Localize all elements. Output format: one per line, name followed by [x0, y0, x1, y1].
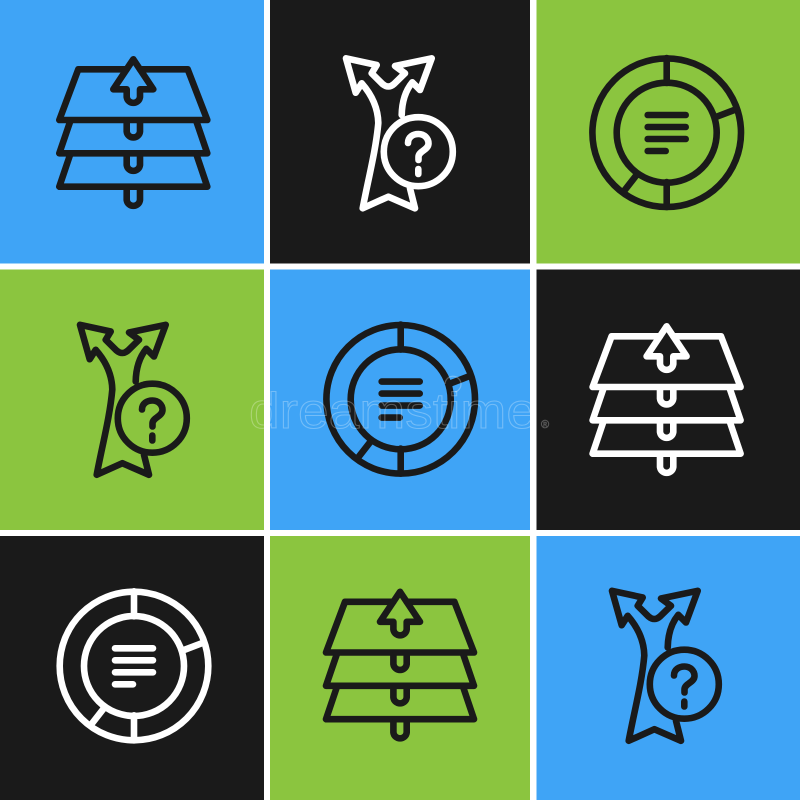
icon: stacked layers with up arrow, black — [59, 59, 207, 206]
panel: black tile, row 2 column 3 — [536, 270, 800, 530]
icon: split road arrow with question mark, black — [80, 325, 187, 475]
panel: blue tile, row 1 column 1 — [0, 0, 264, 264]
icon: donut chart with text lines, black — [326, 325, 475, 474]
panel: green tile, row 3 column 2 — [270, 536, 530, 800]
panel: blue tile, row 3 column 3 — [536, 536, 800, 800]
panel: black tile, row 3 column 1 — [0, 536, 264, 800]
icon: donut chart with text lines, white — [60, 591, 208, 740]
panel: green tile, row 1 column 3 — [536, 0, 800, 264]
icon: donut chart with text lines, black — [592, 58, 741, 207]
watermark: dreamstime — [249, 383, 537, 439]
panel: black tile, row 1 column 2 — [270, 0, 530, 264]
icon: stacked layers with up arrow, white — [593, 326, 741, 473]
panel: blue tile, row 2 column 2 — [270, 270, 530, 530]
watermark: ® — [541, 419, 549, 431]
icon: split road arrow with question mark, black — [612, 591, 719, 741]
icon: split road arrow with question mark, white — [346, 58, 453, 208]
panel: green tile, row 2 column 1 — [0, 270, 264, 530]
icon: stacked layers with up arrow, black — [326, 592, 474, 738]
